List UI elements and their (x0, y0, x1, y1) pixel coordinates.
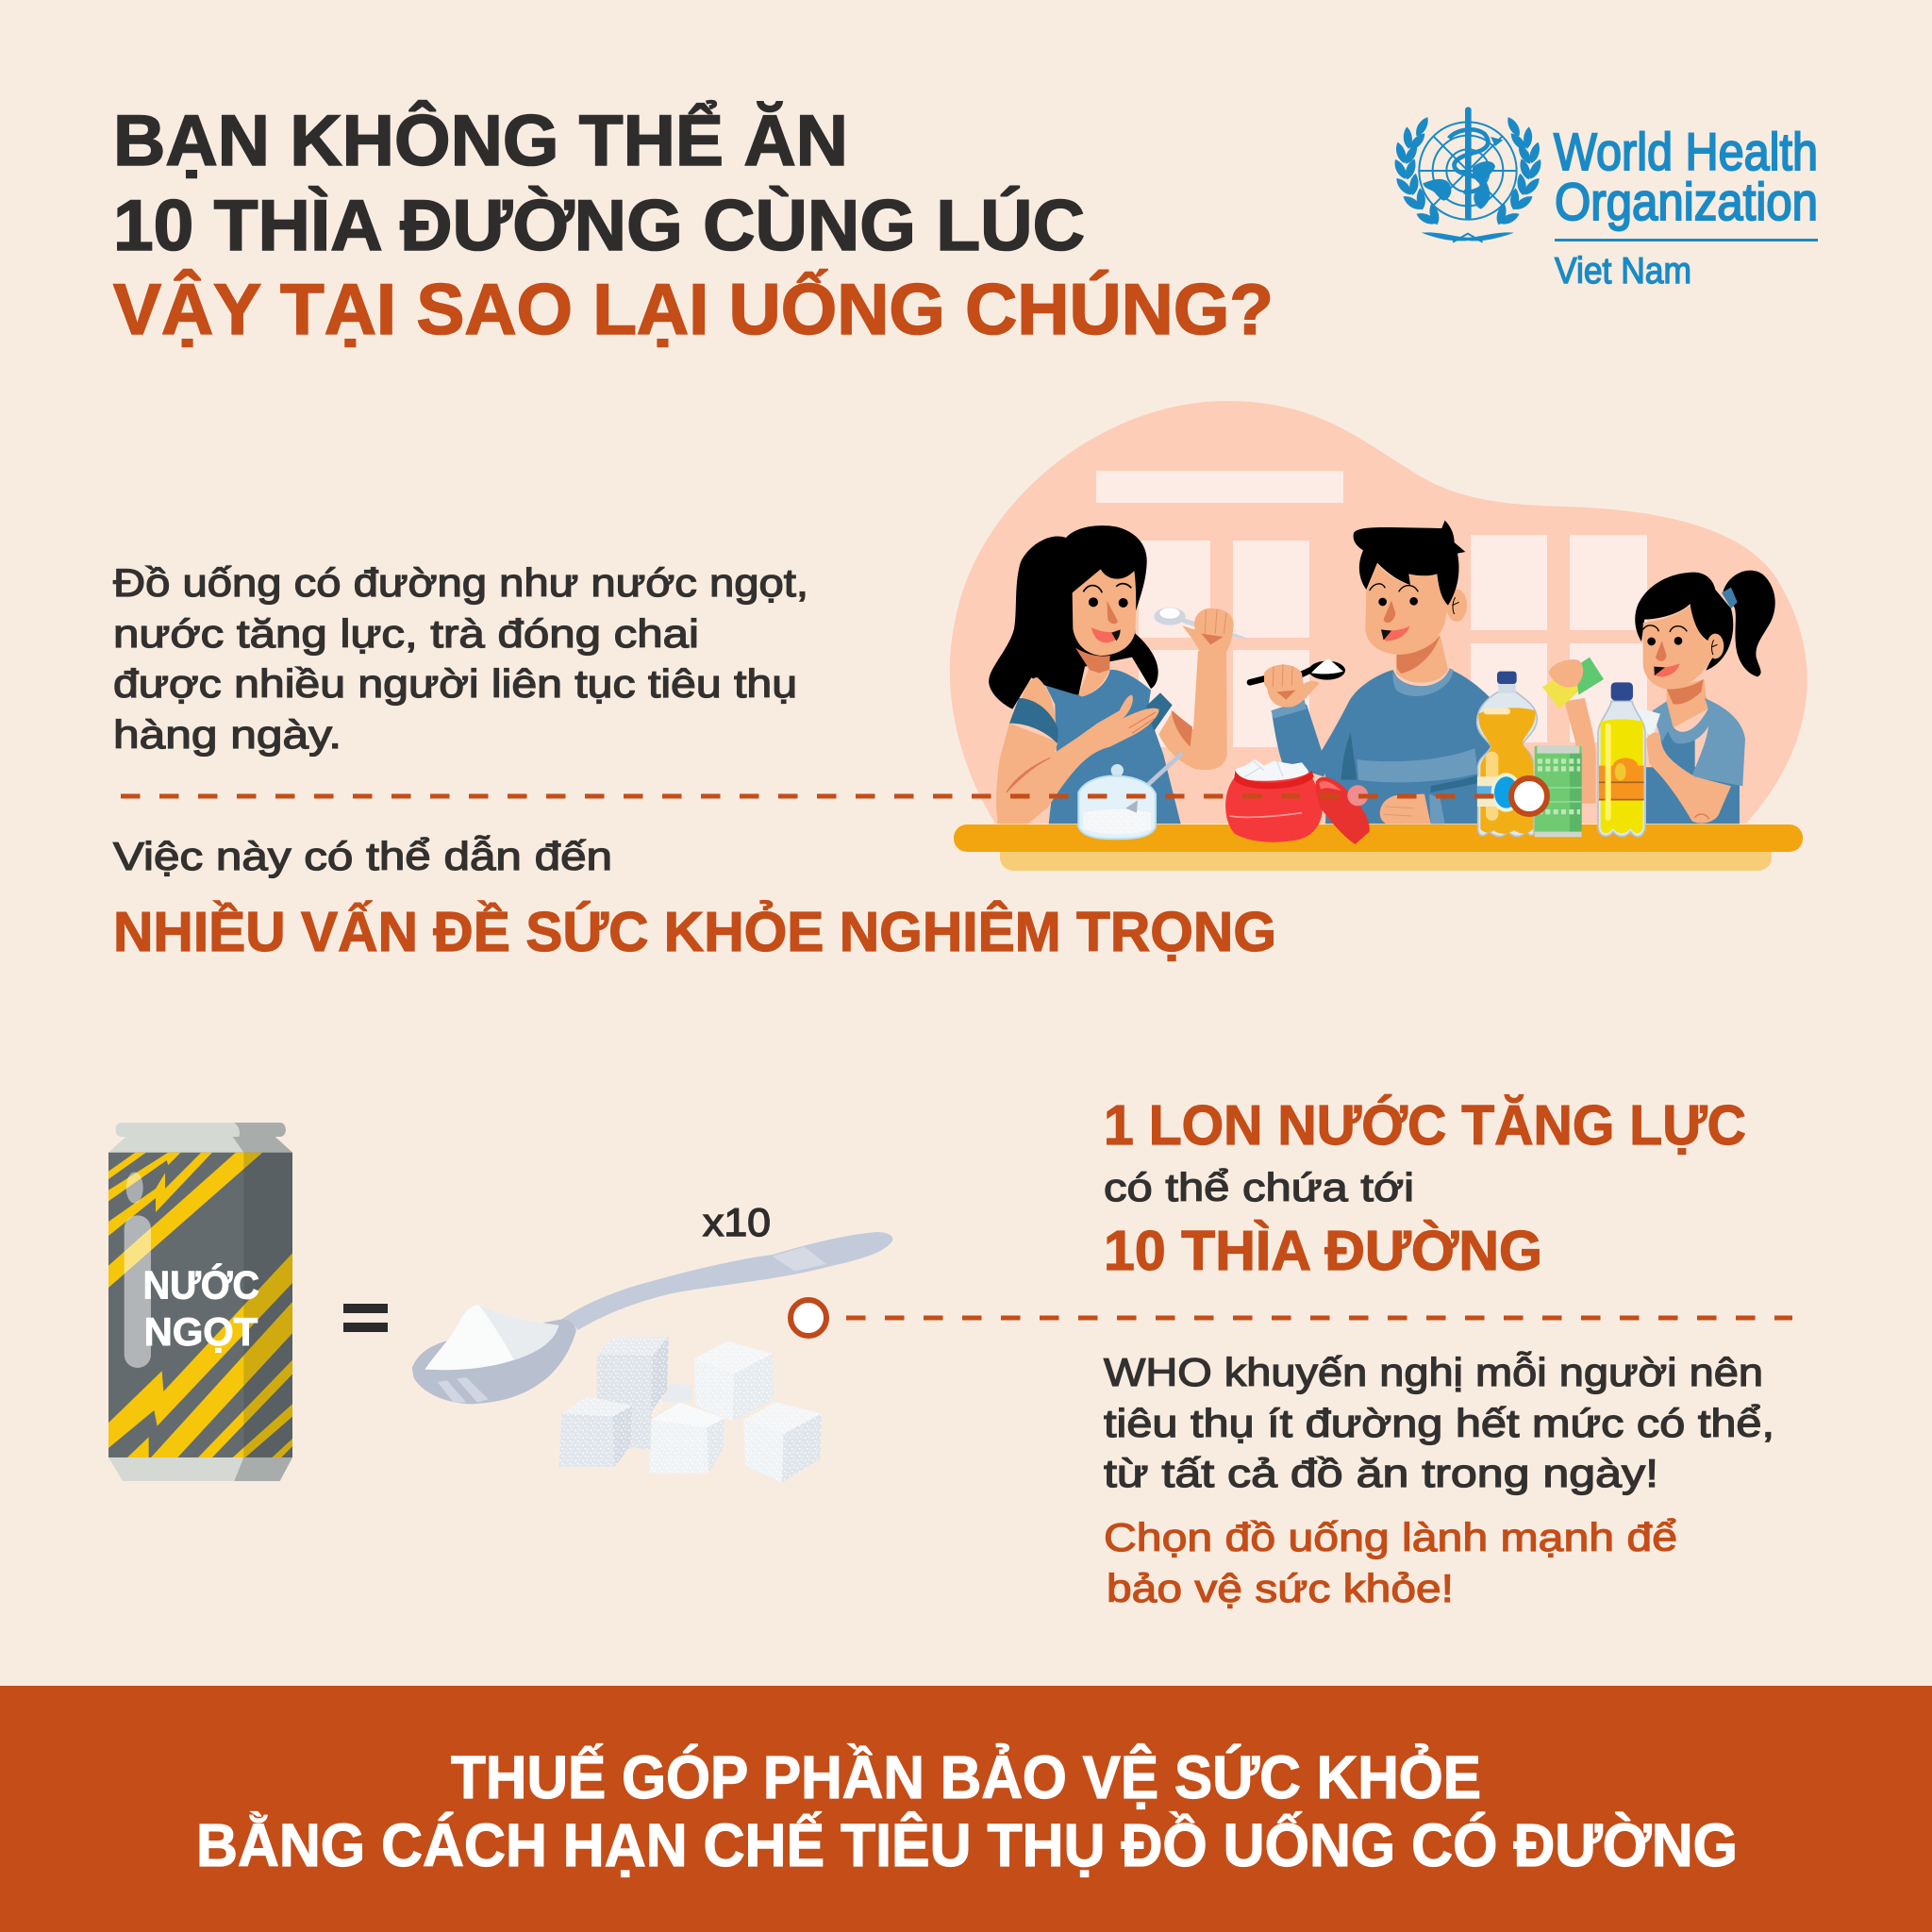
orange soda bottle (1477, 672, 1537, 837)
logo wordmark (1554, 122, 1818, 291)
illustration: family with sugar and sweet drinks (950, 401, 1807, 871)
title: 10 THÌA ĐƯỜNG CÙNG LÚC (113, 186, 1085, 266)
text: healthy choice call to action: bảo vệ sức khỏe! (1107, 1566, 1454, 1610)
footer banner: BẰNG CÁCH HẠN CHẾ TIÊU THỤ ĐỒ UỐNG CÓ ĐƯỜNG (196, 1810, 1738, 1879)
girl (1542, 571, 1775, 824)
sugar cube 4 (650, 1403, 724, 1474)
dashed connector bottom (791, 1300, 1792, 1336)
man (1250, 521, 1497, 824)
yellow bottle (1598, 682, 1645, 837)
footer banner: THUẾ GÓP PHẦN BẢO VỆ SỨC KHỎE (451, 1742, 1481, 1811)
equals sign (343, 1304, 388, 1332)
heading: one energy drink can: 10 THÌA ĐƯỜNG (1104, 1220, 1542, 1282)
text: sugary drinks: hàng ngày. (113, 712, 341, 757)
sugar cube 5 (743, 1403, 822, 1483)
red sugar pot (1225, 759, 1370, 844)
text: consequence: Việc này có thể dẫn đến (113, 834, 612, 878)
icon: energy drink can: NƯỚC (143, 1262, 259, 1307)
heading: one energy drink can: 1 LON NƯỚC TĂNG LỰC (1104, 1094, 1746, 1157)
logo wordmark: Organization (1555, 172, 1818, 231)
heading: one energy drink can (1104, 1094, 1746, 1282)
heading: one energy drink can: có thể chứa tới (1104, 1165, 1414, 1209)
text: sugary drinks: nước tăng lực, trà đóng chai (113, 611, 699, 656)
icon: sugar cubes (558, 1337, 822, 1483)
text: consequence: NHIỀU VẤN ĐỀ SỨC KHỎE NGHIÊM TRỌNG (113, 900, 1276, 963)
text: WHO recommendation: tiêu thụ ít đường hết mức có thể, (1104, 1401, 1774, 1445)
logo wordmark: Viet Nam (1555, 251, 1691, 291)
text: WHO recommendation: từ tất cả đồ ăn trong ngày! (1104, 1451, 1658, 1495)
icon: spoon of sugar (412, 1232, 892, 1404)
sugar cube 1 (597, 1337, 669, 1450)
text: WHO recommendation (1104, 1350, 1774, 1495)
text: healthy choice call to action: Chọn đồ uống lành mạnh để (1104, 1515, 1677, 1559)
title: VẬY TẠI SAO LẠI UỐNG CHÚNG? (113, 269, 1274, 350)
WHO logo (1391, 107, 1818, 291)
woman (989, 525, 1250, 824)
label x10: x10 (703, 1200, 771, 1244)
title: BẠN KHÔNG THỂ ĂN (113, 100, 848, 181)
background blob (950, 401, 1807, 824)
sugar jar (1078, 753, 1182, 839)
logo wordmark: World Health (1554, 122, 1818, 181)
text: sugary drinks (113, 560, 808, 757)
text: consequence (113, 834, 1276, 963)
icon: energy drink can: NGỌT (144, 1309, 258, 1354)
text: sugary drinks: Đồ uống có đường như nước ngọt, (113, 560, 808, 605)
table (954, 824, 1803, 871)
sugar cube small (660, 1384, 692, 1403)
dashed connector top (121, 778, 1547, 814)
sugar cube 2 (694, 1341, 774, 1422)
text: healthy choice call to action (1104, 1515, 1677, 1610)
text: WHO recommendation: WHO khuyến nghị mỗi người nên (1104, 1350, 1763, 1394)
sugar cube 3 (558, 1396, 632, 1467)
green can (1535, 746, 1582, 837)
icon: WHO emblem (1391, 107, 1544, 242)
footer banner (0, 1686, 1932, 1932)
icon: energy drink can (108, 1123, 292, 1481)
title (113, 100, 1274, 350)
windows (1096, 471, 1647, 747)
text: sugary drinks: được nhiều người liên tục tiêu thụ (113, 661, 797, 706)
